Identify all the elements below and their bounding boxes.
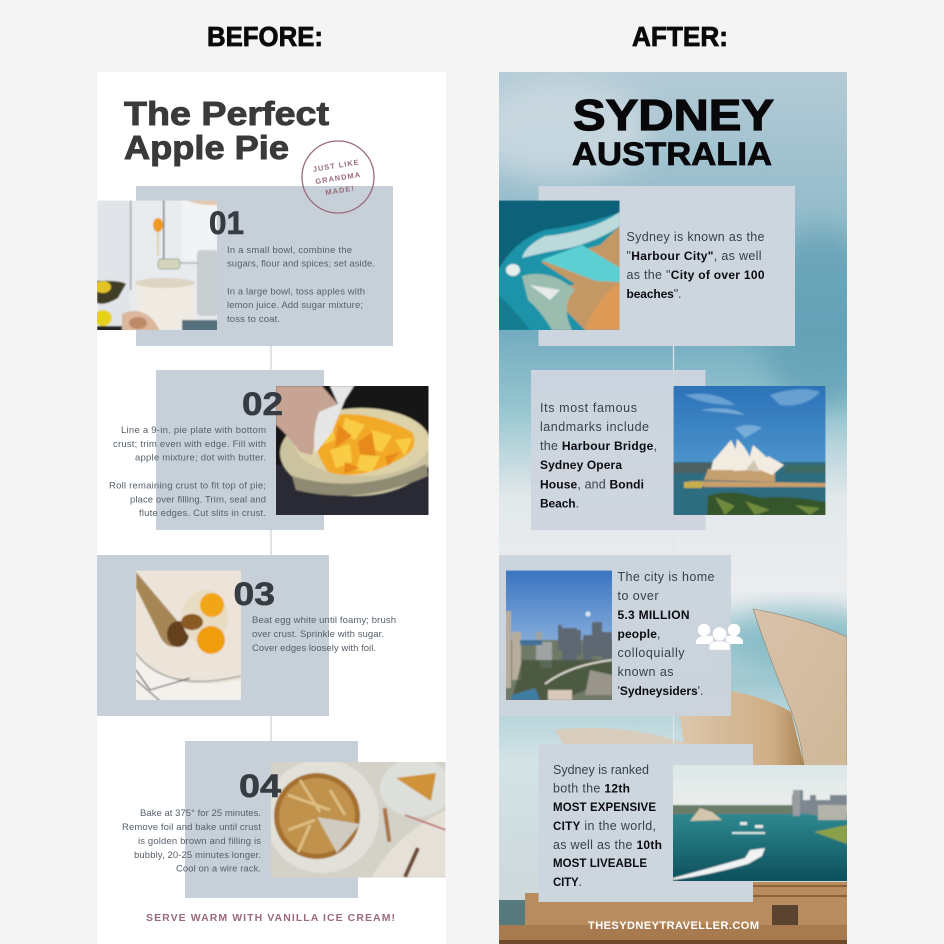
fact 2 text: Beach. [540,496,579,510]
fact 2 text [540,401,657,510]
step 2 text: flute edges. Cut slits in crust. [139,508,266,519]
step 2 text: Line a 9-in. pie plate with bottom [121,425,266,436]
step 1 text: In a large bowl, toss apples with [227,286,365,298]
step 2 photo: filling pie crust [275,385,432,516]
step 1 card [94,186,393,346]
step 3 photo: eggs in flour [135,570,242,701]
fact 3 text: known as [618,665,674,679]
title: sydney australia [572,99,774,166]
step 3 text: Beat egg white until foamy; brush [252,615,396,626]
panel: before, apple pie recipe [94,72,452,944]
step 4 text: Cool on a wire rack. [176,864,261,874]
fact 3 text: people, [618,627,660,641]
panel: after, sydney australia [499,72,847,944]
step 3 text: over crust. Sprinkle with sugar. [252,629,384,640]
fact 3 photo: city skyline [505,570,613,702]
step 4 text: Bake at 375° for 25 minutes. [140,808,261,819]
fact 2 text: the Harbour Bridge, [540,439,657,453]
step 1 text: sugars, flour and spices; set aside. [227,258,375,270]
fact 4 text: MOST LIVEABLE [553,858,647,870]
step 4 text: bubbly, 20-25 minutes longer. [134,850,261,861]
fact 2 text: Sydney Opera [540,458,622,472]
fact 3 text [618,570,715,698]
footer: serve warm: SERVE WARM WITH VANILLA ICE CREAM! [146,912,395,924]
step 1 text: lemon juice. Add sugar mixture; [227,300,363,311]
step 3 card [97,555,396,716]
fact 1 photo: ocean pool [498,200,621,331]
fact 1 text: beaches". [626,287,682,301]
title: the perfect apple pie [124,95,329,166]
fact 4 text: MOST EXPENSIVE [553,802,656,814]
step 1 photo: mixing bowl [94,200,218,331]
step 2 text: crust; trim even with edge. Fill with [113,439,266,450]
fact 4 text: CITY in the world, [553,819,656,833]
step 4 photo: baked pie [271,762,446,878]
stamp: just like grandma made [302,141,374,213]
stamp: just like grandma made: MADE! [325,184,355,197]
fact 2 card [531,370,826,530]
step 2 text [109,425,266,519]
step 2 text: place over filling. Trim, seal and [130,494,266,506]
step 2 text: apple mixture; dot with butter. [135,452,266,464]
stamp: just like grandma made: JUST LIKE [312,157,360,174]
step 2 card [109,370,432,530]
fact 2 text: House, and Bondi [540,478,644,492]
fact 4 text: CITY. [553,875,582,889]
step 4 number: 04 [239,768,281,804]
step 3 number: 03 [234,576,275,612]
step 4 card [122,741,452,898]
heading: before: BEFORE: [207,21,323,52]
title: sydney australia: SYDNEY [573,91,774,140]
fact 3 card [499,555,743,716]
step 1 text: toss to coat. [227,314,280,325]
step 2 number: 02 [242,386,283,422]
step 1 number: 01 [209,205,244,241]
fact 4 text: as well as the 10th [553,838,662,852]
fact 3 text: 'Sydneysiders'. [618,684,704,698]
fact 2 text: Its most famous [540,401,637,415]
fact 4 photo: harbour [672,764,848,882]
footer: website: THESYDNEYTRAVELLER.COM [588,920,759,932]
step 4 text: is golden brown and filling is [138,836,261,847]
fact 1 text: Sydney is known as the [626,230,765,244]
fact 4 card [538,744,848,902]
icon: group of people [696,624,743,650]
step 1 text: In a small bowl, combine the [227,245,352,256]
fact 1 text: as the "City of over 100 [626,268,765,282]
fact 2 text: landmarks include [540,420,649,434]
step 3 text: Cover edges loosely with foil. [252,643,376,654]
fact 3 text: colloquially [618,646,685,660]
title: sydney australia: AUSTRALIA [572,136,772,172]
fact 4 text: Sydney is ranked [553,763,649,777]
step 4 text [122,808,261,874]
fact 3 text: to over [618,589,658,603]
stamp: just like grandma made: GRANDMA [315,170,362,186]
background: sky and opera house [499,72,847,944]
step 1 text [227,245,375,325]
fact 3 text: 5.3 MILLION [618,608,690,622]
fact 4 text: both the 12th [553,782,630,796]
title: the perfect apple pie: The Perfect [124,95,329,132]
fact 1 text [626,230,765,301]
step 2 text: Roll remaining crust to fit top of pie; [109,480,266,492]
fact 2 photo: opera house [673,385,826,516]
heading: after: AFTER: [632,21,728,52]
step 4 text: Remove foil and bake until crust [122,822,261,833]
fact 4 text [553,763,662,889]
fact 1 card [498,186,795,346]
fact 1 text: "Harbour City", as well [626,249,762,263]
title: the perfect apple pie: Apple Pie [124,129,289,166]
fact 3 text: The city is home [618,570,715,584]
step 3 text [252,615,396,654]
